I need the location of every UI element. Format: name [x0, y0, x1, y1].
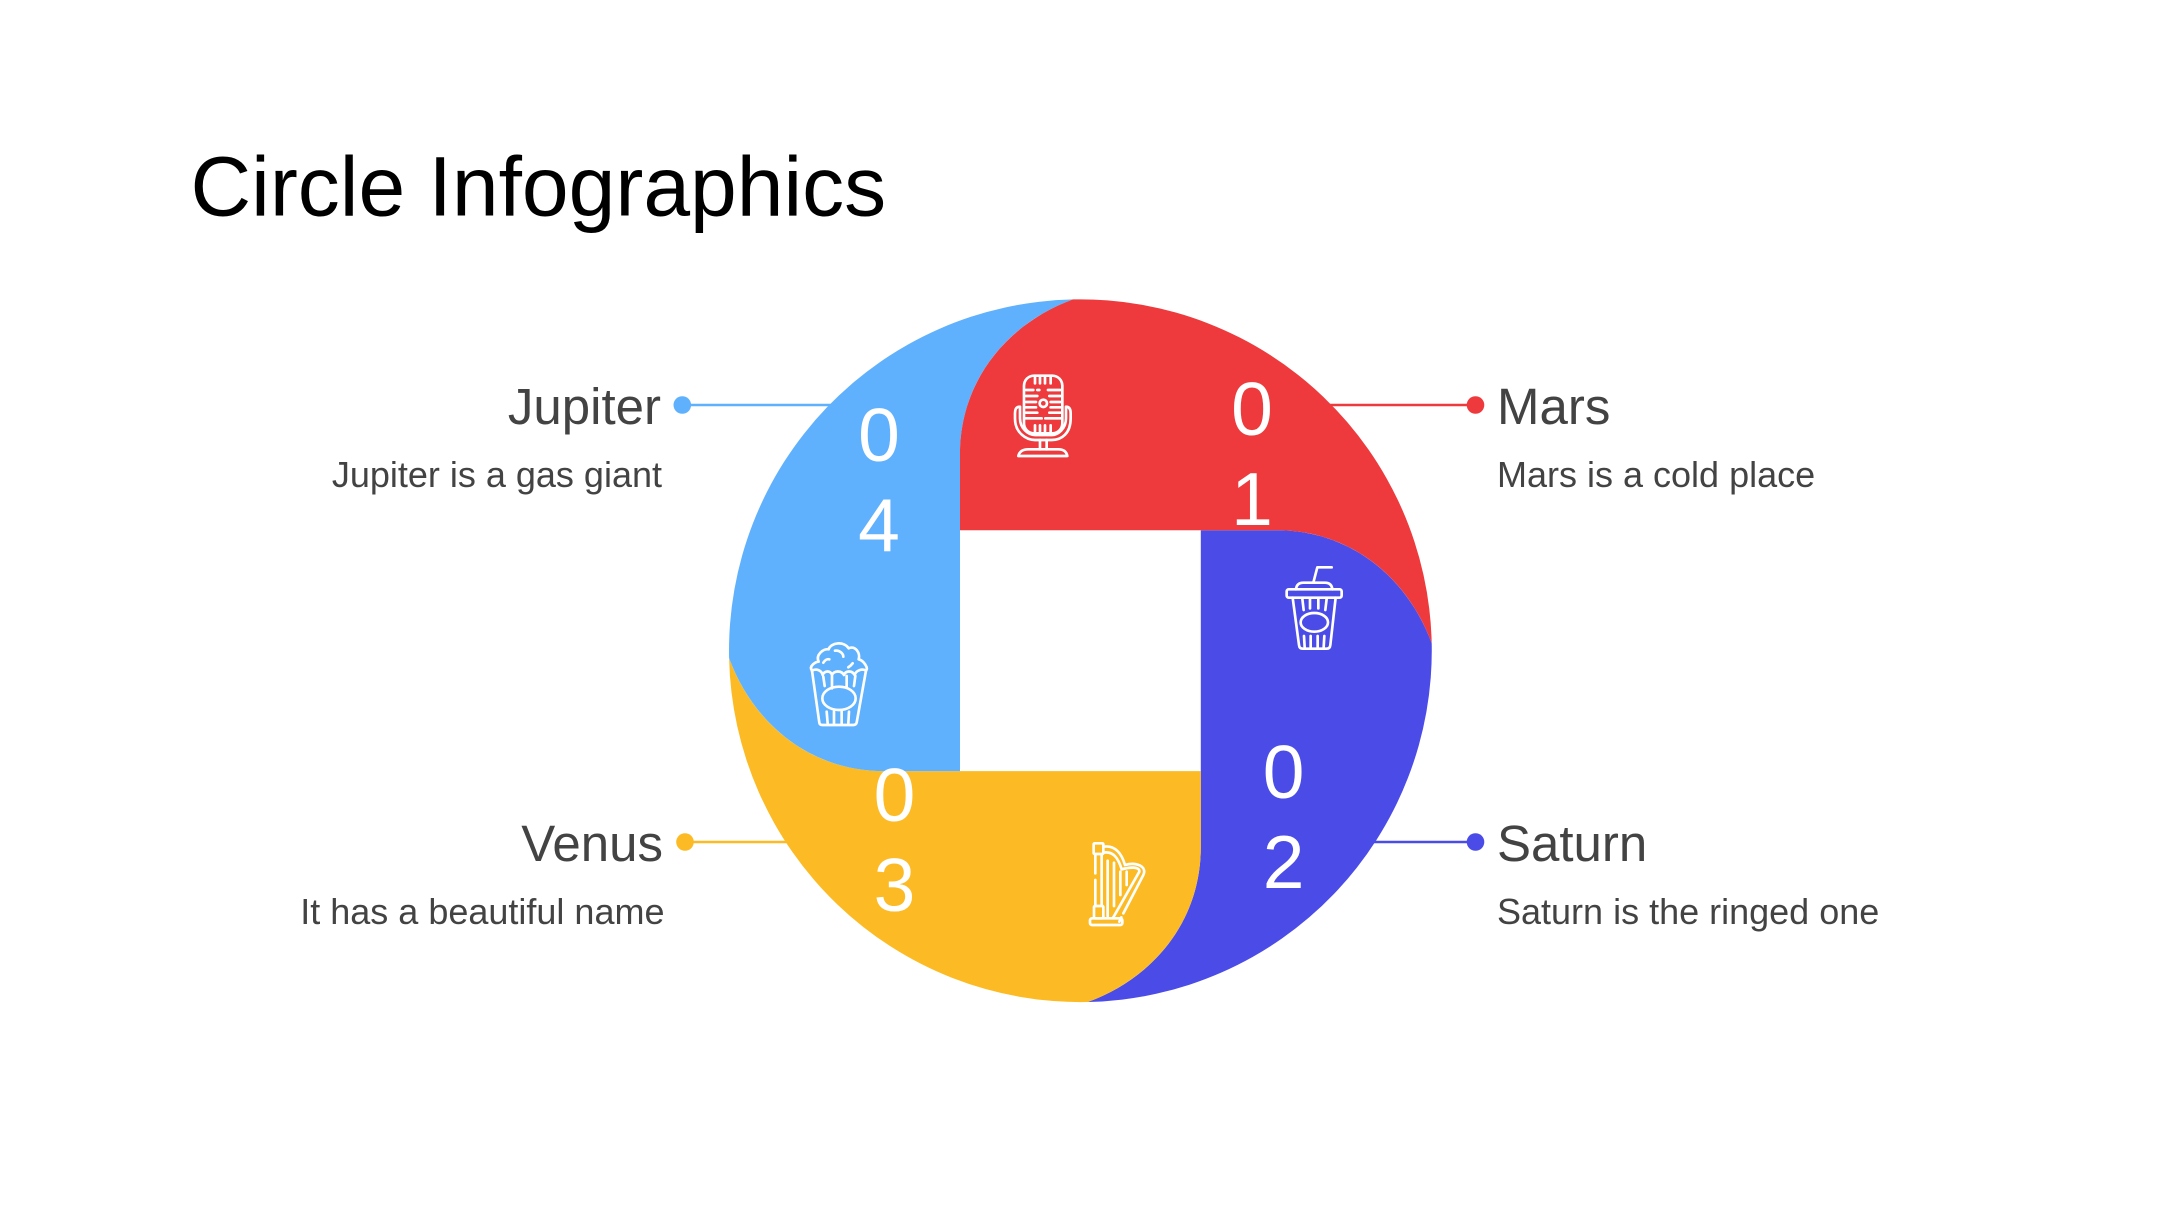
icon: harp	[1090, 843, 1144, 925]
label: Venus: Venus	[521, 815, 663, 872]
segment shape: Saturn	[1088, 530, 1432, 1002]
connector: Jupiter	[674, 396, 835, 414]
icon: soda cup	[1287, 567, 1342, 649]
number 03	[874, 753, 915, 927]
number 02	[1263, 730, 1304, 904]
number 01	[1231, 367, 1273, 541]
label: Venus	[300, 815, 664, 932]
segment shape: Jupiter	[729, 299, 1073, 771]
icon: popcorn	[811, 643, 867, 725]
label: Mars	[1497, 378, 1815, 495]
title: Circle Infographics	[190, 140, 886, 234]
number 04: 0	[858, 393, 900, 477]
number 01: 0	[1231, 367, 1273, 451]
label: Venus: It has a beautiful name	[300, 891, 664, 932]
number 02: 2	[1263, 820, 1304, 904]
number 02: 0	[1263, 730, 1304, 814]
number 04	[858, 393, 900, 567]
number 04: 4	[858, 483, 900, 567]
number 01: 1	[1231, 457, 1273, 541]
label: Mars: Mars	[1497, 378, 1610, 435]
segment shape: Mars	[960, 299, 1432, 643]
label: Saturn: Saturn	[1497, 815, 1647, 872]
icon: microphone	[1015, 376, 1071, 456]
label: Mars: Mars is a cold place	[1497, 454, 1815, 495]
label: Jupiter	[332, 378, 662, 495]
connector: Saturn	[1360, 833, 1484, 851]
label: Saturn	[1497, 815, 1879, 932]
connector: Mars	[1330, 396, 1484, 414]
label: Jupiter: Jupiter is a gas giant	[332, 454, 662, 495]
number 03: 3	[874, 843, 915, 927]
label: Saturn: Saturn is the ringed one	[1497, 891, 1879, 932]
segment shape: Venus	[729, 658, 1201, 1002]
number 03: 0	[874, 753, 915, 837]
connector: Venus	[676, 833, 800, 851]
label: Jupiter: Jupiter	[508, 378, 661, 435]
